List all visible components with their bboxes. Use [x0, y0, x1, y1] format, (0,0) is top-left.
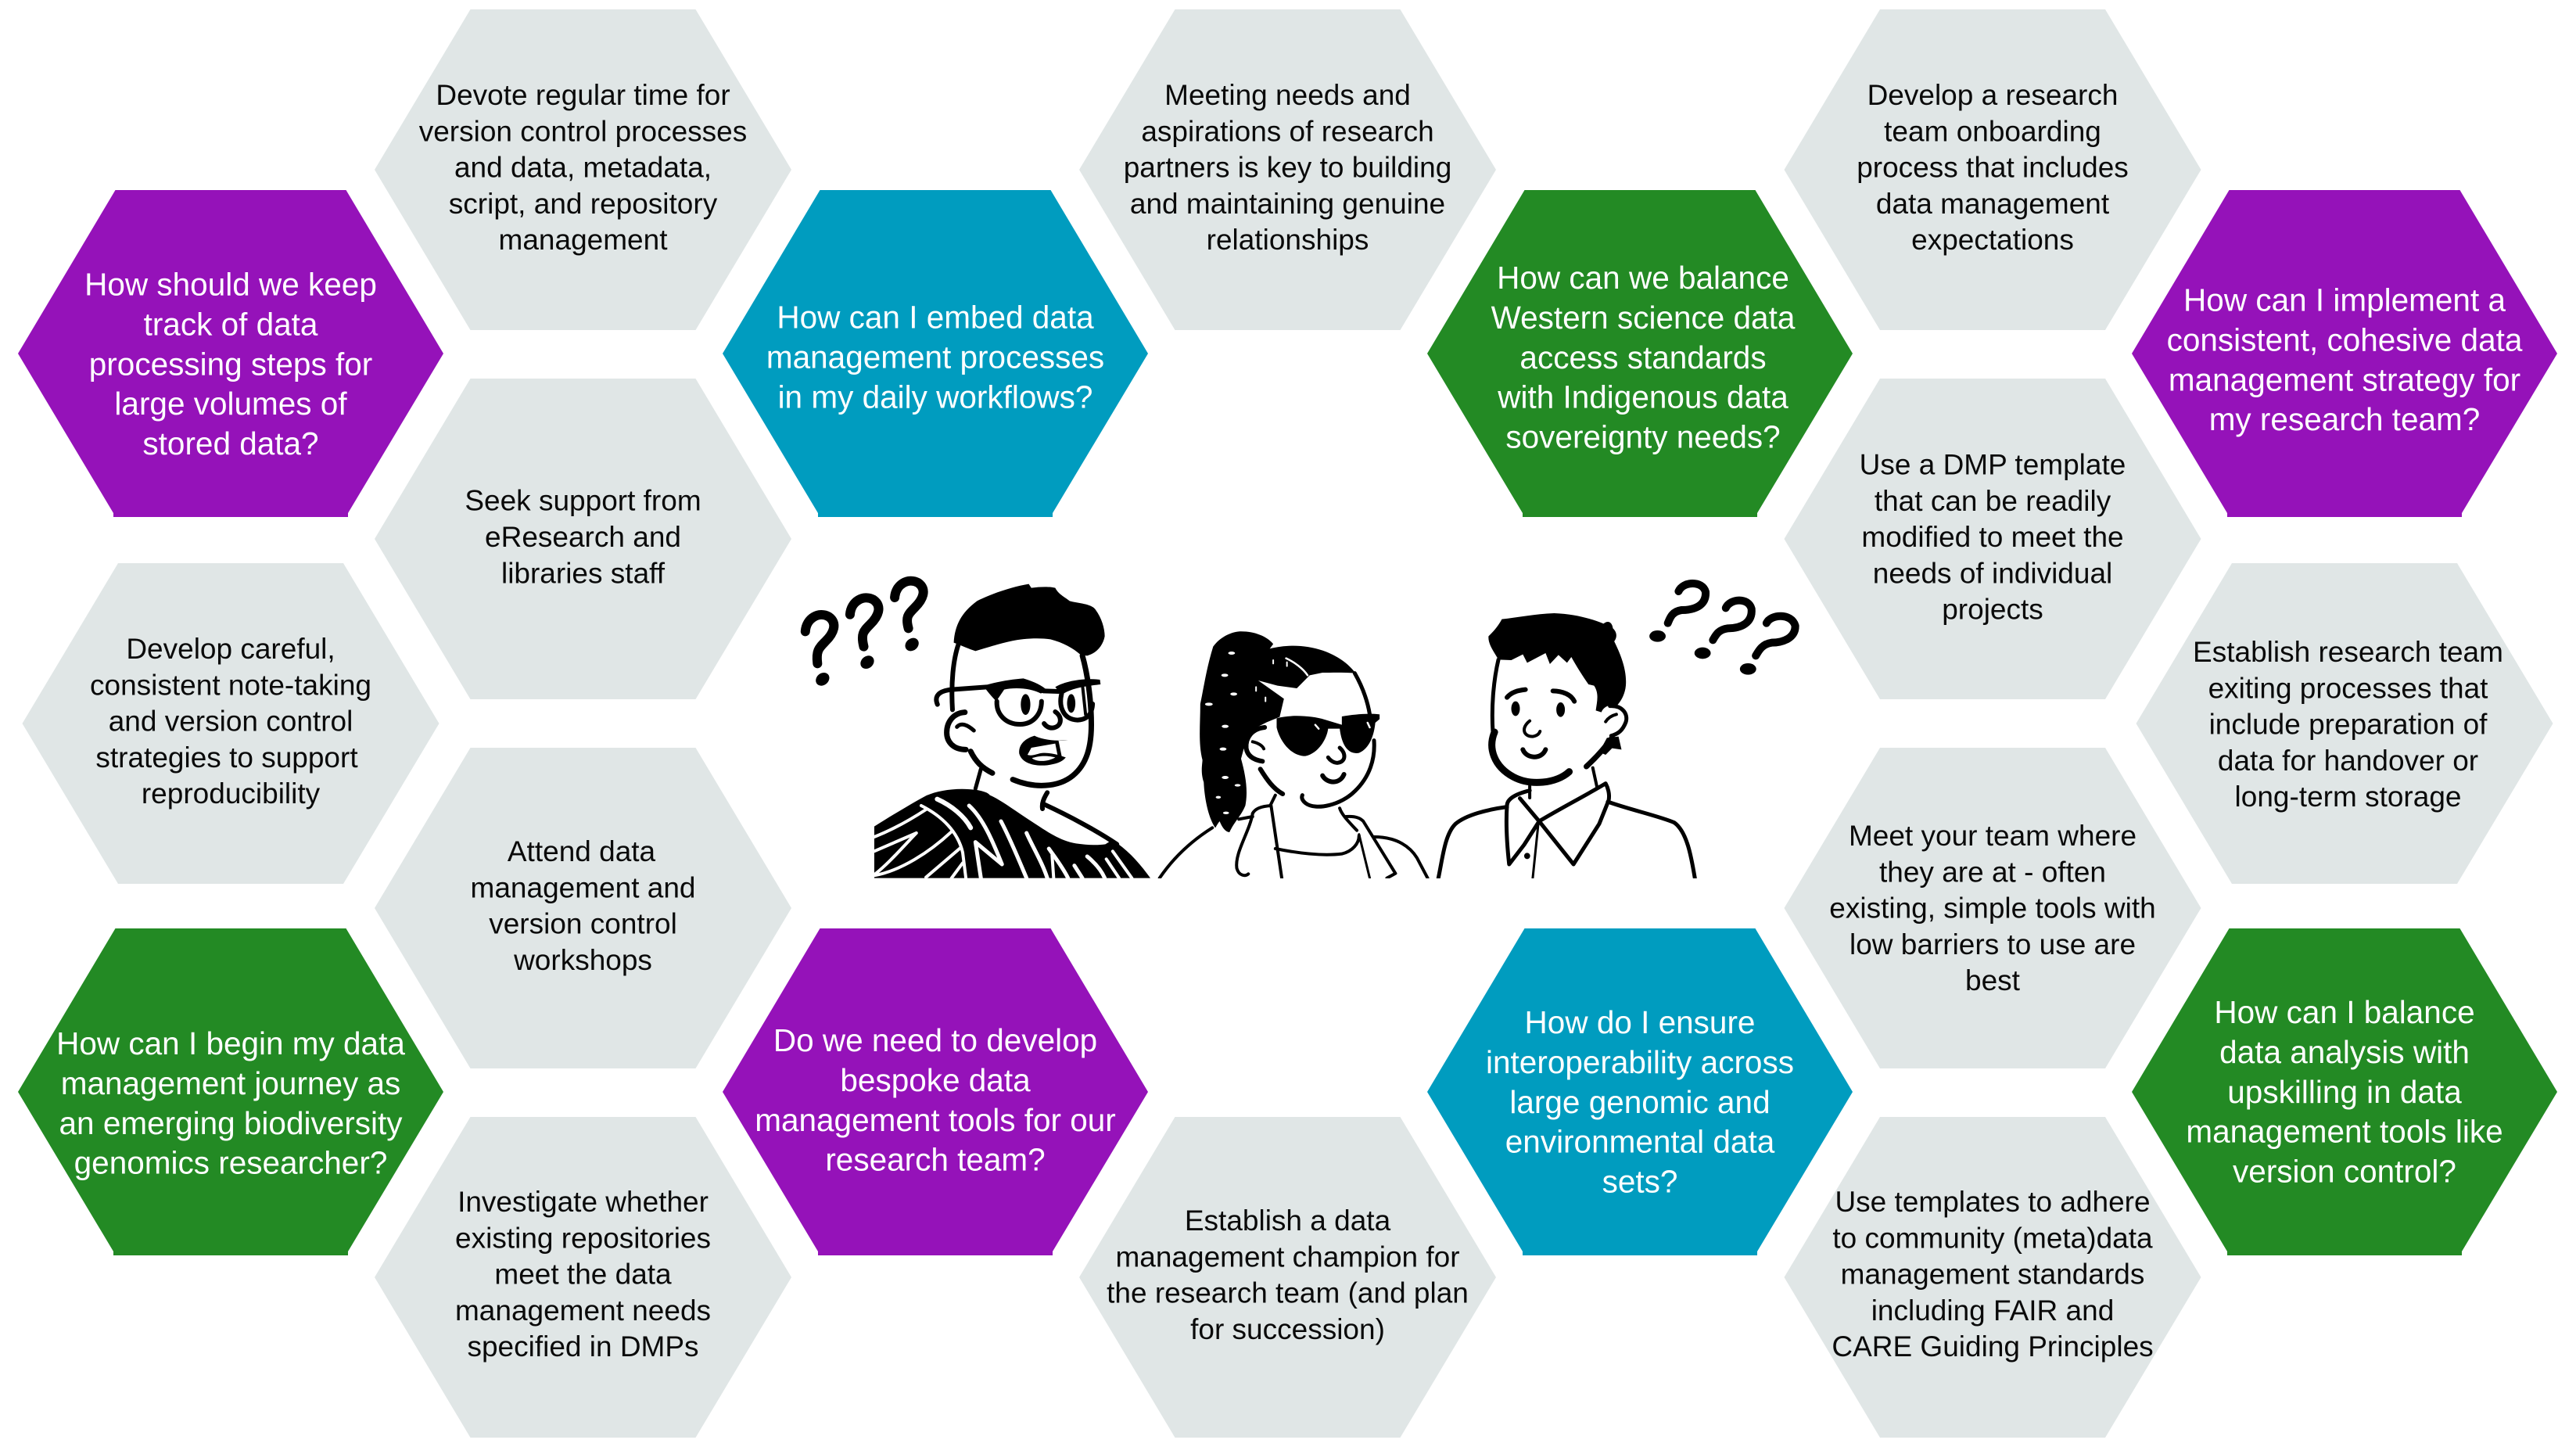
answer hexagon: meet your team: Meet your team where — [1849, 820, 2137, 852]
question hexagon: cohesive strategy: my research team? — [2209, 401, 2480, 437]
question hexagon: keep track of data processing: stored data? — [142, 425, 319, 461]
answer hexagon: exiting processes: exiting processes that — [2208, 672, 2488, 704]
answer hexagon: DMP template: needs of individual — [1873, 557, 2112, 589]
question hexagon: balance analysis with upskilling: data analysis with — [2219, 1034, 2470, 1070]
answer hexagon: DMP template — [1785, 379, 2201, 699]
answer hexagon: onboarding process — [1785, 9, 2201, 330]
answer hexagon: DMP template: projects — [1942, 594, 2043, 626]
answer hexagon: community standards: Use templates to adhere — [1835, 1186, 2151, 1218]
question hexagon: bespoke tools: research team? — [825, 1142, 1046, 1178]
answer hexagon: seek support: libraries staff — [501, 557, 666, 589]
question hexagon: bespoke tools: management tools for our — [755, 1102, 1116, 1138]
question hexagon: Western science and Indigenous data sovereignty: sovereignty needs? — [1505, 419, 1781, 455]
question hexagon: balance analysis with upskilling — [2132, 928, 2557, 1255]
question hexagon: interoperability: large genomic and — [1509, 1084, 1771, 1120]
answer hexagon: research partners: Meeting needs and — [1164, 79, 1411, 111]
answer hexagon: community standards: management standards — [1841, 1258, 2144, 1291]
answer hexagon: data management champion — [1079, 1117, 1496, 1438]
question hexagon: interoperability: sets? — [1602, 1164, 1677, 1200]
answer hexagon: investigate repositories: existing repositories — [455, 1222, 711, 1254]
question hexagon: cohesive strategy — [2132, 190, 2557, 517]
answer hexagon: meet your team: best — [1965, 964, 2021, 996]
answer hexagon: research partners: partners is key to building — [1124, 152, 1451, 184]
answer hexagon: careful note-taking — [22, 563, 439, 884]
answer hexagon: seek support: Seek support from — [465, 485, 701, 517]
answer hexagon: meet your team — [1785, 748, 2201, 1068]
answer hexagon: attend workshops: Attend data — [508, 835, 656, 867]
question hexagon: begin data management journey: How can I begin my data — [56, 1025, 405, 1061]
question hexagon: balance analysis with upskilling: How can I balance — [2214, 994, 2475, 1030]
person with glasses and patterned shirt — [874, 584, 1150, 878]
answer hexagon: investigate repositories: management needs — [455, 1294, 711, 1327]
answer hexagon: data management champion: Establish a data — [1185, 1205, 1391, 1237]
question hexagon: embed data management: in my daily workflows? — [778, 379, 1092, 415]
answer hexagon: investigate repositories — [375, 1117, 791, 1438]
question hexagon: embed data management — [723, 190, 1148, 517]
question hexagon: interoperability: How do I ensure — [1525, 1004, 1755, 1040]
person with braid and sunglasses — [1160, 631, 1428, 878]
answer hexagon: onboarding process: data management — [1876, 188, 2110, 220]
question hexagon: interoperability: interoperability across — [1486, 1044, 1794, 1080]
answer hexagon: research partners: relationships — [1207, 224, 1369, 256]
answer hexagon: onboarding process: process that includes — [1857, 152, 2129, 184]
person with short hair and collared shirt — [1438, 613, 1695, 878]
question hexagon: bespoke tools: Do we need to develop — [773, 1022, 1097, 1058]
question hexagon: begin data management journey: management journey as — [61, 1065, 400, 1101]
answer hexagon: attend workshops: version control — [489, 908, 677, 940]
answer hexagon: devote regular time: version control processes — [419, 115, 747, 147]
question hexagon: begin data management journey — [18, 928, 443, 1255]
question hexagon: interoperability — [1427, 928, 1853, 1255]
answer hexagon: data management champion: for succession) — [1190, 1313, 1385, 1345]
answer hexagon: devote regular time: and data, metadata, — [454, 152, 712, 184]
answer hexagon: onboarding process: expectations — [1911, 224, 2074, 256]
answer hexagon: onboarding process: team onboarding — [1884, 115, 2101, 147]
answer hexagon: data management champion: management champion for — [1115, 1241, 1460, 1273]
answer hexagon: careful note-taking: reproducibility — [142, 777, 321, 810]
question hexagon: cohesive strategy: How can I implement a — [2183, 282, 2506, 318]
answer hexagon: devote regular time: script, and repository — [449, 188, 718, 220]
answer hexagon: data management champion: the research team (and plan — [1107, 1277, 1469, 1309]
question hexagon: cohesive strategy: consistent, cohesive data — [2167, 321, 2523, 357]
question hexagon: Western science and Indigenous data sovereignty: How can we balance — [1497, 260, 1789, 296]
answer hexagon: research partners: and maintaining genuine — [1130, 188, 1445, 220]
question hexagon: Western science and Indigenous data sovereignty: with Indigenous data — [1497, 379, 1788, 415]
answer hexagon: DMP template: that can be readily — [1875, 485, 2111, 517]
answer hexagon: exiting processes: data for handover or — [2218, 745, 2478, 777]
answer hexagon: onboarding process: Develop a research — [1867, 79, 2118, 111]
answer hexagon: careful note-taking: consistent note-taking — [90, 669, 371, 701]
answer hexagon: community standards: to community (meta)data — [1832, 1222, 2153, 1254]
answer hexagon: DMP template: Use a DMP template — [1860, 449, 2126, 480]
answer hexagon: devote regular time: management — [499, 224, 668, 256]
question hexagon: keep track of data processing: How should we keep — [84, 266, 377, 302]
answer hexagon: careful note-taking: Develop careful, — [126, 633, 335, 665]
answer hexagon: exiting processes: long-term storage — [2235, 781, 2461, 813]
question hexagon: balance analysis with upskilling: upskilling in data — [2227, 1074, 2462, 1110]
question hexagon: keep track of data processing — [18, 190, 443, 517]
question hexagon: begin data management journey: genomics researcher? — [74, 1145, 387, 1181]
answer hexagon: attend workshops: management and — [471, 871, 695, 903]
answer hexagon: meet your team: existing, simple tools with — [1829, 892, 2156, 925]
question hexagon: keep track of data processing: processing steps for — [89, 346, 372, 382]
answer hexagon: careful note-taking: strategies to support — [95, 741, 358, 774]
answer hexagon: seek support: eResearch and — [485, 521, 681, 553]
question hexagon: bespoke tools — [723, 928, 1148, 1255]
question hexagon: cohesive strategy: management strategy for — [2169, 361, 2520, 397]
illustration: three researchers with question marks — [805, 581, 1796, 878]
answer hexagon: DMP template: modified to meet the — [1861, 521, 2124, 553]
question hexagon: embed data management: How can I embed data — [777, 299, 1094, 335]
question hexagon: balance analysis with upskilling: management tools like — [2186, 1114, 2503, 1150]
answer hexagon: research partners — [1079, 9, 1496, 330]
question hexagon: embed data management: management processes — [766, 339, 1104, 375]
icon: question marks left — [805, 581, 924, 688]
question hexagon: Western science and Indigenous data sovereignty: access standards — [1519, 339, 1767, 375]
answer hexagon: careful note-taking: and version control — [109, 706, 353, 738]
answer hexagon: attend workshops: workshops — [513, 944, 652, 976]
answer hexagon: meet your team: low barriers to use are — [1849, 928, 2136, 960]
question hexagon: Western science and Indigenous data sovereignty: Western science data — [1491, 300, 1796, 336]
answer hexagon: research partners: aspirations of research — [1141, 115, 1434, 147]
answer hexagon: meet your team: they are at - often — [1879, 856, 2106, 888]
question hexagon: bespoke tools: bespoke data — [840, 1062, 1031, 1098]
question hexagon: keep track of data processing: track of data — [144, 306, 318, 342]
question hexagon: interoperability: environmental data — [1505, 1124, 1775, 1160]
answer hexagon: investigate repositories: meet the data — [494, 1258, 672, 1291]
answer hexagon: community standards — [1785, 1117, 2201, 1438]
answer hexagon: community standards: including FAIR and — [1871, 1294, 2114, 1327]
answer hexagon: community standards: CARE Guiding Principles — [1832, 1330, 2154, 1363]
answer hexagon: attend workshops — [375, 748, 791, 1068]
icon: question marks right — [1649, 583, 1796, 675]
answer hexagon: exiting processes: Establish research team — [2193, 636, 2503, 668]
answer hexagon: exiting processes: include preparation of — [2209, 709, 2488, 741]
question hexagon: begin data management journey: an emerging biodiversity — [59, 1105, 403, 1141]
question hexagon: balance analysis with upskilling: version control? — [2233, 1154, 2456, 1190]
answer hexagon: exiting processes — [2137, 563, 2553, 884]
answer hexagon: seek support — [375, 379, 791, 699]
answer hexagon: devote regular time: Devote regular time for — [436, 79, 730, 111]
answer hexagon: investigate repositories: Investigate whether — [457, 1186, 709, 1218]
answer hexagon: investigate repositories: specified in DMPs — [467, 1330, 699, 1363]
answer hexagon: devote regular time — [375, 9, 791, 330]
question hexagon: Western science and Indigenous data sovereignty — [1427, 190, 1853, 517]
question hexagon: keep track of data processing: large volumes of — [114, 386, 347, 422]
